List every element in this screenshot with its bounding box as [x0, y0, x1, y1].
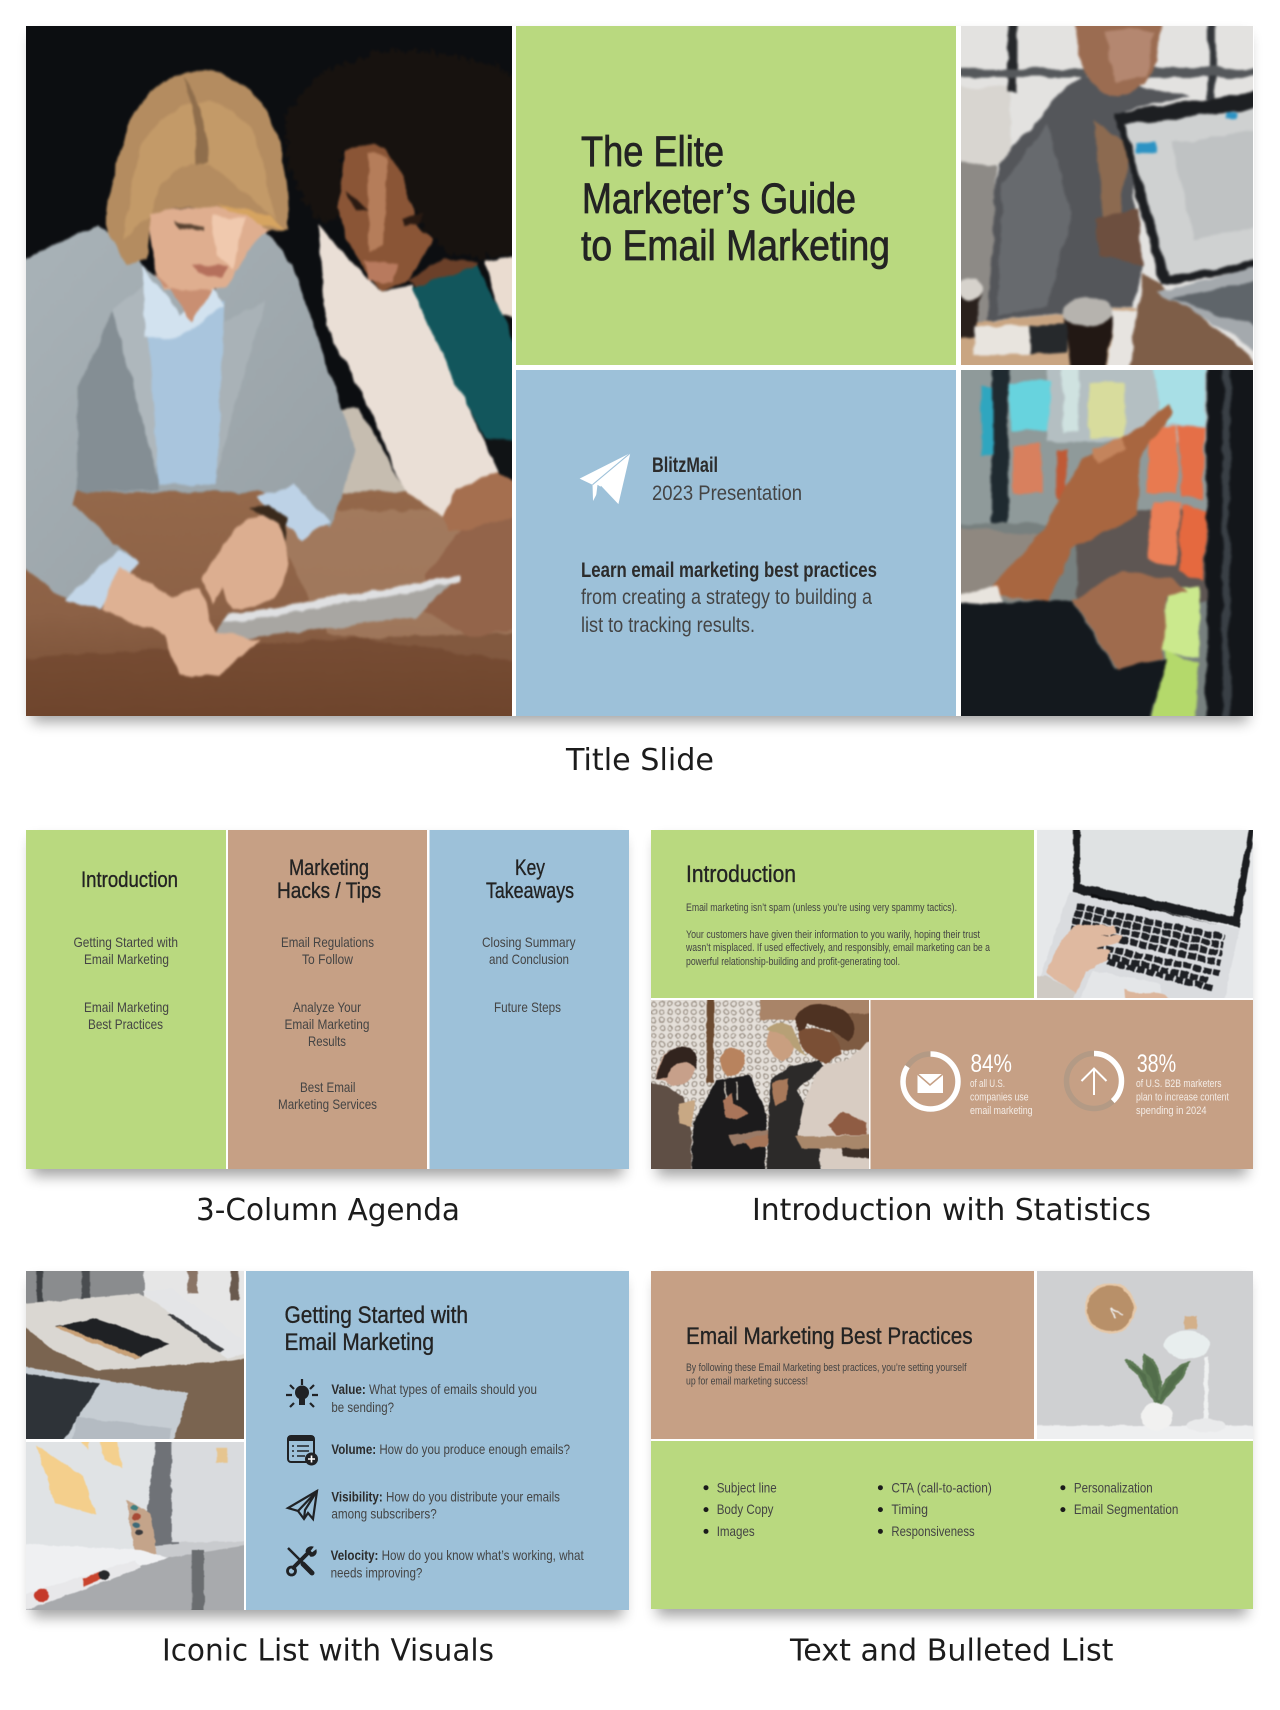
photo: group of colleagues [651, 1000, 869, 1169]
list column 3 [1060, 1479, 1178, 1517]
column: key takeaways: Takeaways [486, 878, 574, 903]
column: marketing hacks: To Follow [302, 951, 354, 967]
stat: 38%: spending in 2024 [1136, 1105, 1206, 1117]
item: velocity: needs improving? [331, 1565, 423, 1581]
introduction text block: Your customers have given their information to you warily, hoping their trust [686, 929, 980, 941]
list column 3: Email Segmentation [1074, 1501, 1178, 1517]
brand name and year [652, 454, 802, 505]
heading block: up for email marketing success! [686, 1376, 808, 1388]
panel: iconic list with visuals [12, 1260, 629, 1669]
list column 3: Personalization [1074, 1479, 1153, 1495]
photo: hands pointing at sticky notes [961, 370, 1253, 716]
column: marketing hacks: Marketing [289, 855, 369, 880]
icon: light bulb [286, 1379, 318, 1407]
column: introduction: Best Practices [88, 1016, 163, 1032]
item: value: Value: What types of emails should you [331, 1381, 537, 1397]
item: visibility [331, 1489, 560, 1522]
photo: man with laptop [961, 26, 1253, 365]
stat: 84%: companies use [970, 1092, 1029, 1104]
column: marketing hacks: Email Regulations [281, 934, 374, 950]
icon: document with plus [288, 1436, 318, 1466]
column: marketing hacks: Email Marketing [284, 1016, 370, 1032]
description: Learn email marketing best practices [581, 559, 877, 582]
panel: 3-column agenda [26, 830, 629, 1228]
list column 2 [878, 1479, 992, 1539]
chart: 84% ring with envelope [903, 1054, 958, 1109]
list block [246, 1271, 629, 1610]
icon: paper plane outline [288, 1491, 317, 1519]
column: key takeaways: Future Steps [494, 999, 561, 1015]
heading: guide title: The Elite [581, 128, 724, 176]
heading block: By following these Email Marketing best practices, you’re setting yourself [686, 1362, 967, 1374]
caption: iconic list: Iconic List with Visuals [162, 1634, 494, 1669]
panel: title slide [12, 10, 1271, 778]
stat: 38%: 38% [1137, 1050, 1176, 1078]
description: from creating a strategy to building a [581, 586, 872, 609]
photo: two women with tablet [12, 10, 526, 735]
column: marketing hacks: Best Email [300, 1079, 356, 1095]
icon: crossed tools [288, 1547, 316, 1575]
heading: guide title [581, 128, 890, 270]
column: key takeaways [430, 830, 629, 1169]
stat: 84%: 84% [970, 1050, 1012, 1078]
item: visibility: Visibility: How do you distribute your emails [331, 1489, 560, 1505]
item: velocity [331, 1547, 584, 1581]
heading: getting started: Getting Started with [284, 1302, 468, 1329]
info block [516, 370, 956, 716]
caption: introduction with statistics: Introduction with Statistics [752, 1193, 1151, 1228]
chart: 38% ring with arrow [1066, 1054, 1122, 1108]
list column 2: Responsiveness [891, 1523, 975, 1539]
stat: 84%: email marketing [970, 1105, 1033, 1117]
column: key takeaways: Closing Summary [482, 934, 576, 950]
column: marketing hacks: Results [308, 1033, 346, 1049]
column: introduction: Introduction [81, 867, 178, 892]
list column 1: Body Copy [717, 1501, 774, 1517]
caption: title slide: Title Slide [565, 743, 714, 778]
photo: whiteboard with notes [26, 1442, 244, 1610]
icon: paper plane [580, 453, 630, 504]
introduction text block [651, 830, 1034, 998]
item: velocity: Velocity: How do you know what’s working, what [331, 1547, 584, 1563]
panel: text and bulleted list [651, 1260, 1268, 1669]
caption: agenda: 3-Column Agenda [196, 1193, 460, 1228]
statistics block [870, 1000, 1253, 1169]
item: volume: Volume: How do you produce enough emails? [331, 1441, 570, 1457]
stat: 84%: of all U.S. [970, 1078, 1005, 1090]
description [581, 559, 877, 637]
heading: getting started [284, 1302, 468, 1356]
photo: desk with clock, plant and lamp [1037, 1271, 1253, 1439]
column: introduction: Getting Started with [74, 934, 178, 950]
column: marketing hacks: Analyze Your [293, 999, 361, 1015]
brand name and year: 2023 Presentation [652, 482, 802, 505]
item: visibility: among subscribers? [331, 1506, 437, 1522]
introduction text block: Introduction [686, 861, 796, 888]
photo: laptop typing [1037, 830, 1253, 998]
column: marketing hacks: Hacks / Tips [277, 878, 381, 903]
brand name and year: BlitzMail [652, 454, 718, 477]
list column 2: CTA (call-to-action) [891, 1479, 992, 1495]
caption: text and bulleted list: Text and Bulleted List [789, 1634, 1114, 1669]
column: key takeaways: Key [515, 855, 545, 880]
column: introduction [26, 830, 226, 1169]
heading: getting started: Email Marketing [284, 1329, 434, 1356]
stat: 38%: of U.S. B2B marketers [1136, 1078, 1222, 1090]
column: introduction: Email Marketing [84, 951, 169, 967]
item: value: be sending? [331, 1399, 394, 1415]
list column 1: Images [717, 1523, 755, 1539]
list column 1 [704, 1479, 777, 1539]
stat: 84% [970, 1050, 1033, 1117]
column: key takeaways: and Conclusion [489, 951, 569, 967]
heading block: Email Marketing Best Practices [686, 1323, 973, 1350]
heading: guide title: Marketer’s Guide [582, 175, 856, 223]
item: value [331, 1381, 537, 1415]
stat: 38%: plan to increase content [1136, 1092, 1229, 1104]
bullet list block [651, 1441, 1253, 1609]
column: marketing hacks [228, 830, 427, 1169]
title block [516, 26, 956, 365]
introduction text block: Email marketing isn’t spam (unless you’re using very spammy tactics). [686, 902, 957, 914]
introduction text block: wasn’t misplaced. If used effectively, and responsibly, email marketing can be a [685, 942, 991, 954]
photo: phone on notebook [26, 1271, 244, 1439]
description: list to tracking results. [581, 614, 755, 637]
introduction text block: powerful relationship-building and profit-generating tool. [686, 956, 900, 968]
stat: 38% [1136, 1050, 1229, 1117]
heading: guide title: to Email Marketing [581, 222, 890, 270]
list column 1: Subject line [717, 1479, 777, 1495]
heading block [651, 1271, 1034, 1439]
list column 2: Timing [891, 1501, 928, 1517]
column: marketing hacks: Marketing Services [278, 1096, 377, 1112]
panel: introduction with statistics [640, 819, 1266, 1228]
column: introduction: Email Marketing [84, 999, 169, 1015]
